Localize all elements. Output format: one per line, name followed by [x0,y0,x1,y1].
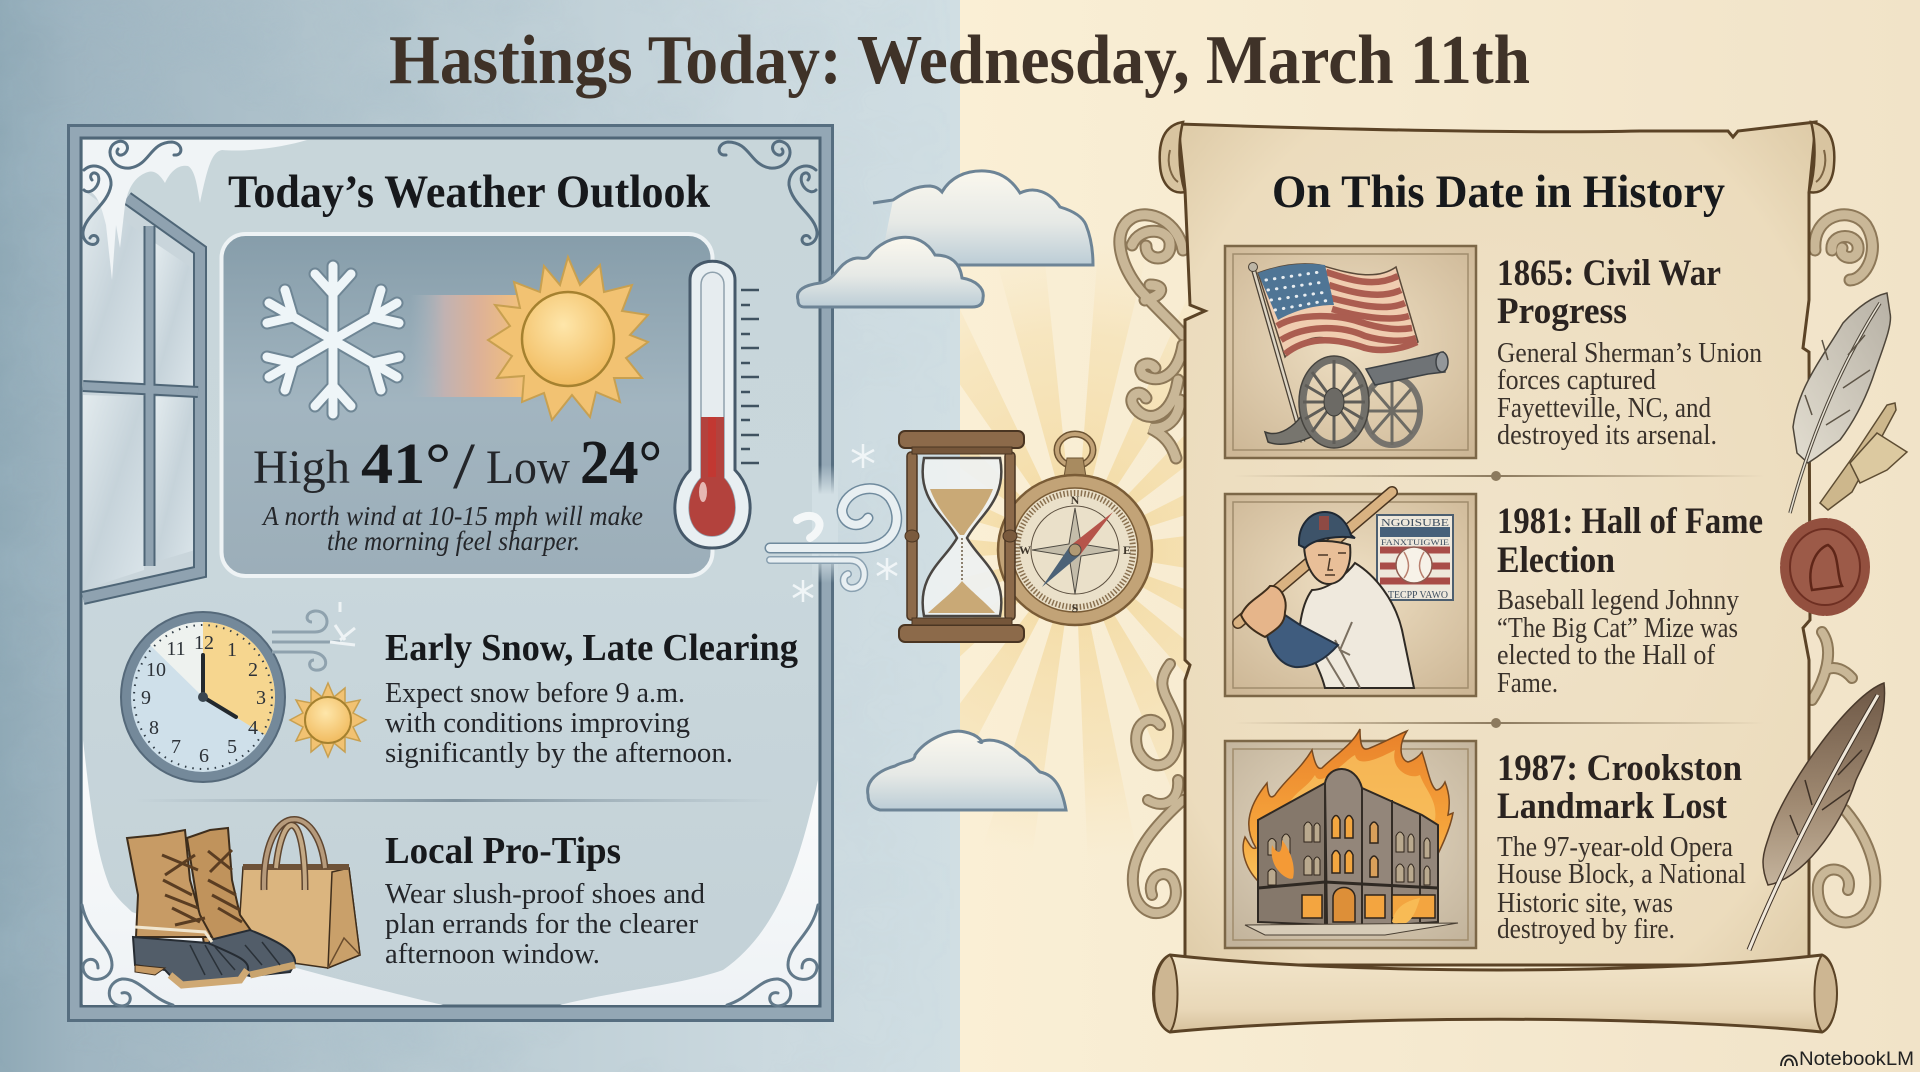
picture: burning building [1225,729,1476,948]
text: 1981: Baseball legend Johnny [1497,585,1739,616]
text: 1865: General Sherman’s Union [1497,338,1762,369]
text: 1865: destroyed its arsenal. [1497,420,1717,451]
history item: 1987 [1225,729,1746,948]
text: 1987: Historic site, was [1497,888,1673,919]
text: 1987: destroyed by fire. [1497,914,1675,945]
icon: clock: 8 [149,717,159,739]
watermark: NotebookLM: NotebookLM [1799,1049,1914,1070]
text: 1987: House Block, a National [1497,859,1746,890]
front boot [127,830,248,986]
picture: flag and cannon [1225,246,1476,458]
sunburst rays behind compass [920,395,1230,705]
heading: local pro-tips: Local Pro-Tips [385,830,621,872]
text: 1865: Fayetteville, NC, and [1497,393,1711,424]
cannon [1265,352,1448,448]
panel: weather outlook [68,126,832,1020]
heading: 1987: Landmark Lost [1497,786,1728,827]
scroll curl: top left [1160,122,1185,192]
scroll flourish: lower left [1133,664,1183,913]
icon: light quill feather [1790,293,1891,513]
player body [1241,512,1414,688]
snow drifts [83,740,818,1005]
cloud: upper front [797,237,983,307]
icon: clock: 12 [194,632,214,654]
snow cap and icicles [83,140,307,280]
text: snow timing: significantly by the afternoon. [385,737,733,769]
text: snow timing: with conditions improving [385,707,690,739]
picture: baseball player [1225,492,1476,696]
text: tips: afternoon window. [385,938,600,970]
card: temperature [222,234,759,576]
icon: clock: 11 [166,638,186,660]
heading: 1865: 1865: Civil War [1497,253,1721,294]
icon: compass: W [1019,543,1031,557]
icon: clock: 5 [227,736,237,758]
heading: 1981: Election [1497,540,1615,581]
temperature reading [253,429,662,503]
cloud: lower [868,731,1066,810]
panel frame [68,126,832,1020]
heading: 1865: Progress [1497,291,1627,332]
scroll flourish: upper right [1815,215,1872,280]
text: tips: Wear slush-proof shoes and [385,878,705,910]
icon: snowflakes [793,444,897,602]
icon: frosted window [83,190,205,603]
text: 1981: Fame. [1497,668,1558,699]
icon: small sun [290,683,366,757]
heading: 1981: 1981: Hall of Fame [1497,501,1763,542]
corner ornament: bottom right [727,905,818,1006]
scroll flourish: upper left [1120,215,1183,458]
text: 1981: “The Big Cat” Mize was [1497,613,1738,644]
scroll parchment body [1178,122,1816,965]
text: 1865 [1497,338,1762,451]
panel: history scroll [1120,122,1907,1032]
icon: wind swirl across border [770,489,897,588]
corner ornament: bottom left [82,905,173,1006]
icon: compass: S [1072,601,1079,615]
icon: clock: 3 [256,687,266,709]
history item: 1981 [1225,492,1763,699]
text: tips [385,878,705,970]
icon: snowflake [267,266,399,414]
icon: thermometer [675,261,759,548]
heading: on this date in history: On This Date in History [1272,166,1725,218]
icon: dark quill feather [1749,683,1885,950]
title: Hastings Today: Wednesday, March 11th [389,22,1530,99]
background: cold side [0,0,696,1072]
hall of fame badge [1377,515,1453,601]
flames [1243,729,1453,900]
history item: 1865 [1225,246,1762,458]
heading: 1981 [1497,501,1763,581]
heading: 1865 [1497,253,1721,332]
icon: compass: E [1123,543,1131,557]
bat [1238,492,1392,623]
text: 1981 [1497,585,1739,699]
temperature reading: Low [486,441,570,494]
icon: clock: 4 [248,717,258,739]
building [1245,769,1458,935]
icon: compass [998,434,1152,625]
icon: wax seal [1784,522,1866,612]
heading: early snow, late clearing: Early Snow, Late Clearing [385,627,798,669]
icon: clock [121,612,285,782]
temperature reading: / [453,430,476,503]
back boot [187,828,295,976]
icon: clock: 6 [199,745,209,767]
hall of fame badge: TECPP VAWO [1388,590,1448,601]
heading: 1987 [1497,748,1742,827]
cloud: upper back [873,171,1093,265]
frame fade behind wind [812,465,838,583]
temperature reading: 41° [361,431,451,496]
temperature reading: High [253,441,350,494]
icon: wind gust [272,602,355,670]
icon: clock: 10 [146,659,166,681]
text: snow timing: Expect snow before 9 a.m. [385,677,685,709]
text: snow timing [385,677,733,769]
hall of fame badge: FANXTUIGWIE [1381,538,1449,547]
text: 1865: forces captured [1497,365,1656,396]
heading: 1987: 1987: Crookston [1497,748,1742,789]
scroll curl: top right [1809,122,1834,192]
icon: clock: 1 [227,639,237,661]
wind note [261,501,643,556]
icon: boots and bag [127,819,360,986]
heading: today's weather outlook: Today’s Weather Outlook [228,166,711,218]
text: 1981: elected to the Hall of [1497,640,1716,671]
icon: hourglass [899,431,1024,642]
scroll bottom roll [1154,955,1837,1032]
icon: clock: 9 [141,687,151,709]
icon: compass: N [1071,493,1080,507]
text: tips: plan errands for the clearer [385,908,698,940]
temperature reading: 24° [580,429,662,497]
wind note: A north wind at 10-15 mph will make [261,501,643,531]
text: 1987 [1497,832,1746,945]
flag [1248,262,1418,442]
hall of fame badge: NGOISUBE [1381,518,1449,529]
icon: torn parchment piece [1820,403,1907,510]
corner ornament: top left [83,141,181,244]
text: 1987: The 97-year-old Opera [1497,832,1734,863]
corner ornament: top right [719,141,817,244]
scroll flourish: lower right [1812,632,1875,922]
temperature transition band [410,295,525,397]
background: warm side [960,0,1920,1072]
wind note: the morning feel sharper. [327,526,580,556]
icon: sun [488,257,648,420]
shopping bag [238,819,360,968]
icon: clock: 7 [171,736,181,758]
icon: clock: 2 [248,659,258,681]
